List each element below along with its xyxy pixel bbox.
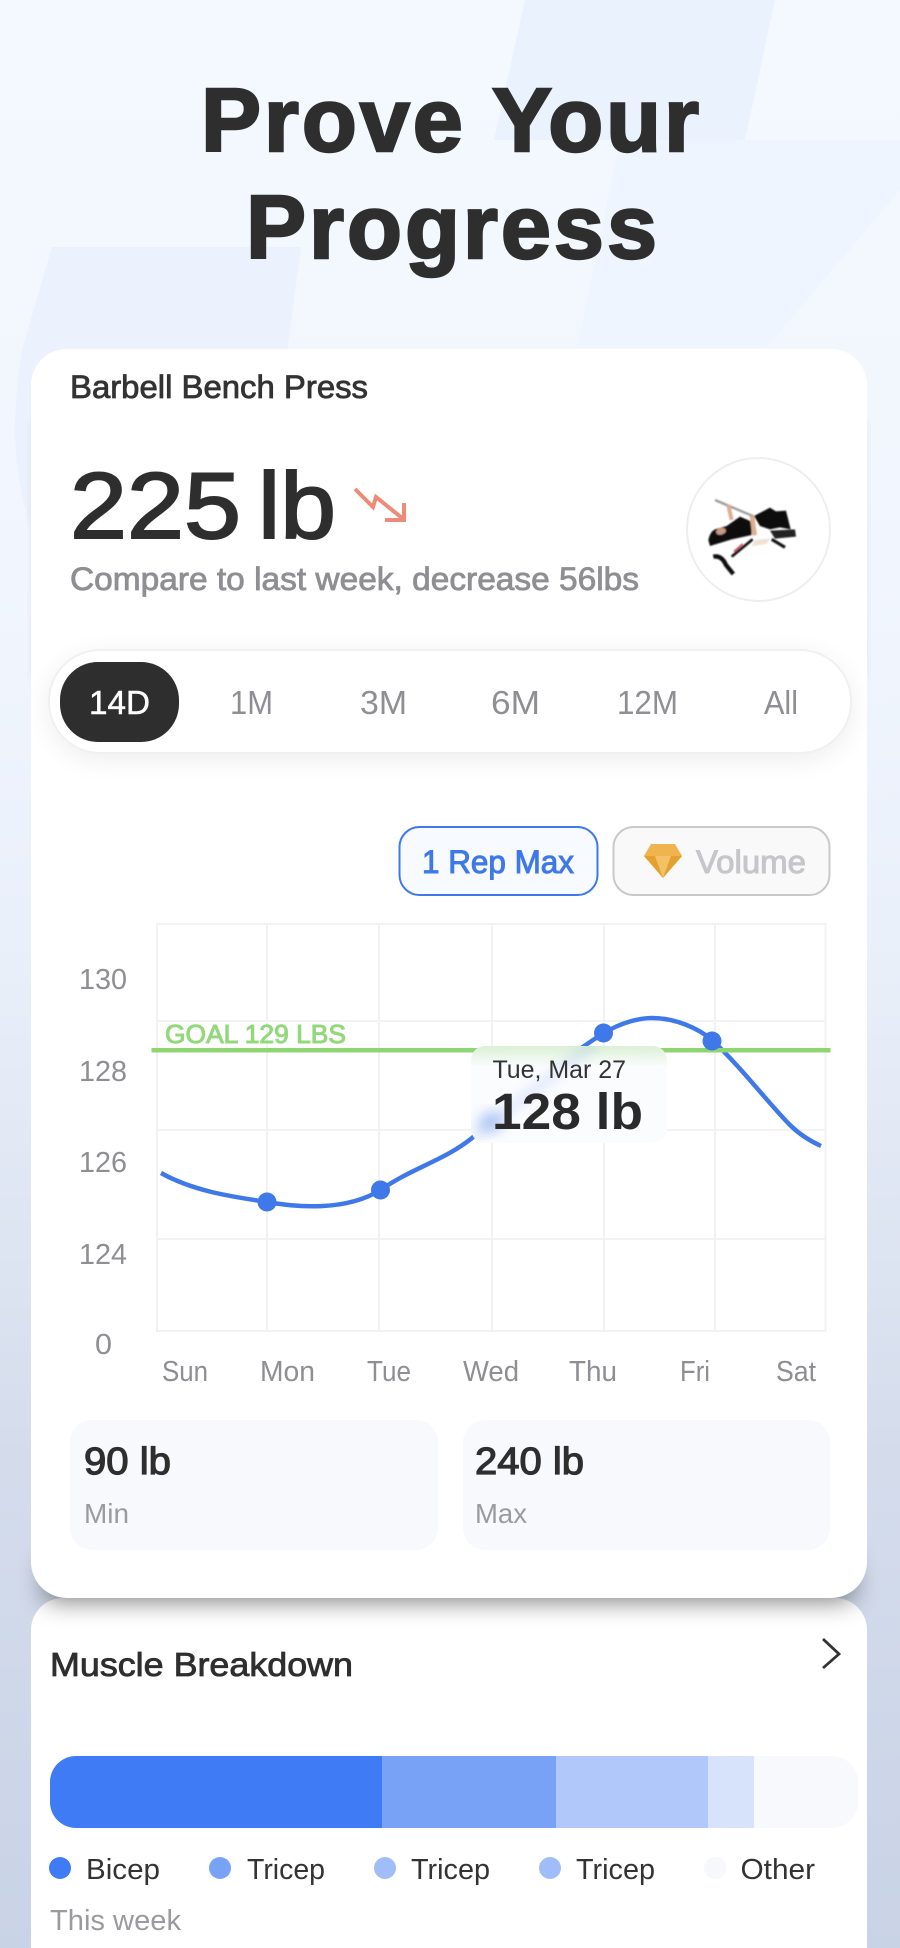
range selector: 6M bbox=[491, 684, 540, 721]
button: 1 rep max bbox=[400, 827, 598, 895]
range selector: All bbox=[764, 684, 798, 721]
data line bbox=[161, 1018, 821, 1206]
legend: Other bbox=[740, 1854, 815, 1886]
legend: Bicep bbox=[86, 1854, 160, 1886]
range selector: 3M bbox=[360, 684, 407, 721]
x axis labels bbox=[162, 1356, 816, 1388]
title bbox=[201, 71, 699, 278]
card shadow bbox=[46, 1560, 852, 1600]
line chart bbox=[79, 924, 830, 1388]
panel: exercise card bbox=[31, 349, 867, 1598]
title: Progress bbox=[246, 178, 657, 278]
stat: max: 240 lb bbox=[475, 1441, 584, 1483]
y axis labels: 124 bbox=[79, 1239, 127, 1271]
data points bbox=[258, 1024, 722, 1212]
stat: min: Min bbox=[84, 1498, 129, 1529]
icon: chevron bbox=[823, 1639, 839, 1668]
big value: lb bbox=[258, 453, 336, 558]
tooltip: 128 lb bbox=[492, 1083, 643, 1140]
panel: muscle breakdown bbox=[31, 1598, 867, 1948]
goal line bbox=[152, 1048, 830, 1052]
y axis labels bbox=[79, 964, 127, 1361]
range selector bbox=[49, 650, 851, 759]
x axis labels: Sun bbox=[162, 1356, 208, 1388]
y axis labels: 0 bbox=[95, 1329, 112, 1361]
button: 1 rep max: 1 Rep Max bbox=[422, 844, 574, 880]
button: volume bbox=[614, 827, 830, 895]
heading: muscle breakdown: Muscle Breakdown bbox=[50, 1646, 353, 1683]
icon: down trend arrow bbox=[355, 489, 404, 520]
range selector: 12M bbox=[617, 684, 678, 721]
caption: this week: This week bbox=[50, 1905, 181, 1937]
tooltip bbox=[471, 1046, 667, 1143]
x axis labels: Mon bbox=[260, 1356, 315, 1388]
x axis labels: Tue bbox=[367, 1356, 411, 1388]
x axis labels: Fri bbox=[680, 1356, 710, 1388]
x axis labels: Sat bbox=[776, 1356, 816, 1388]
range selector: 14D bbox=[89, 684, 150, 721]
y axis labels: 128 bbox=[79, 1056, 127, 1088]
x axis labels: Thu bbox=[569, 1356, 617, 1388]
goal label: GOAL 129 LBS bbox=[165, 1019, 346, 1049]
legend: Tricep bbox=[247, 1854, 325, 1886]
stat: max: Max bbox=[475, 1498, 527, 1529]
icon: gem bbox=[644, 844, 682, 878]
x axis labels: Wed bbox=[463, 1356, 519, 1388]
title: Prove Your bbox=[201, 71, 699, 171]
stat: min bbox=[70, 1420, 438, 1550]
button: volume: Volume bbox=[696, 844, 806, 880]
legend: Tricep bbox=[576, 1854, 655, 1886]
legend: Tricep bbox=[411, 1854, 490, 1886]
stat: min: 90 lb bbox=[84, 1441, 171, 1483]
big value: 225 bbox=[70, 453, 241, 558]
comparison text: Compare to last week, decrease 56lbs bbox=[70, 561, 639, 597]
y axis labels: 130 bbox=[79, 964, 127, 996]
exercise name: Barbell Bench Press bbox=[70, 369, 368, 405]
stacked bar bbox=[50, 1756, 754, 1828]
range selector: 1M bbox=[230, 684, 273, 721]
legend bbox=[49, 1854, 815, 1886]
y axis labels: 126 bbox=[79, 1147, 127, 1179]
icon: bench press photo bbox=[687, 458, 830, 601]
big value bbox=[70, 453, 336, 558]
tooltip: Tue, Mar 27 bbox=[492, 1056, 626, 1084]
stat: max bbox=[463, 1420, 830, 1550]
active pill: 14D bbox=[60, 662, 179, 742]
